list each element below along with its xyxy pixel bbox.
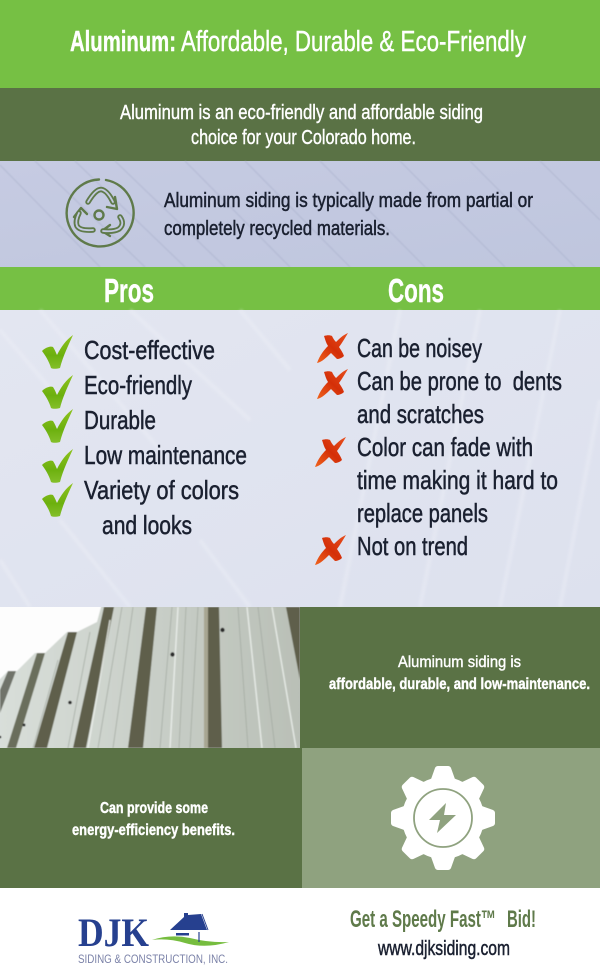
intro band	[0, 88, 600, 161]
heading: cons: Cons	[388, 272, 444, 309]
panel text: energy-efficiency benefits.	[72, 822, 235, 839]
pros text: Durable	[84, 405, 156, 435]
panel: affordable durable low-maintenance	[300, 607, 600, 748]
cons text: Can be noisey	[357, 333, 482, 363]
intro text: choice for your Colorado home.	[191, 127, 416, 149]
pros text: Eco-friendly	[84, 370, 192, 400]
logo: DJK Siding & Construction	[78, 910, 229, 966]
cons text: time making it hard to	[357, 465, 558, 495]
intro text	[120, 102, 483, 149]
cons text	[357, 333, 562, 561]
recycling text: Aluminum siding is typically made from partial or	[164, 190, 533, 212]
title banner	[0, 0, 600, 88]
cons text: replace panels	[357, 498, 488, 528]
panel text: Aluminum siding is	[398, 654, 521, 671]
recycling text: completely recycled materials.	[164, 218, 390, 240]
logo: DJK Siding & Construction: DJK	[78, 910, 149, 955]
panel: energy efficiency	[0, 748, 302, 888]
pros and cons header	[0, 267, 600, 310]
pros text: and looks	[102, 510, 192, 540]
photo: aluminum siding panels	[0, 607, 300, 748]
cons text: Color can fade with	[357, 432, 533, 462]
pros text	[84, 335, 247, 540]
panel text	[329, 654, 590, 693]
icon: check marks	[42, 335, 73, 517]
cons text: and scratches	[357, 399, 484, 429]
panel text	[72, 800, 235, 839]
intro text: Aluminum is an eco-friendly and affordable siding	[120, 102, 483, 124]
recycled materials panel	[0, 161, 600, 267]
icon: recycling arrows	[67, 180, 134, 246]
call to action: Bid!	[507, 906, 536, 933]
panel: gear icon	[302, 748, 600, 888]
pros text: Variety of colors	[84, 475, 239, 505]
title text: Aluminum:	[70, 26, 176, 58]
pros text: Cost-effective	[84, 335, 215, 365]
footer	[0, 888, 600, 979]
pros text: Low maintenance	[84, 440, 247, 470]
icon: x marks	[315, 333, 348, 565]
website url: www.djksiding.com	[377, 938, 510, 960]
cons list	[315, 333, 562, 565]
cons text: Not on trend	[357, 531, 468, 561]
pros and cons panel	[0, 310, 600, 607]
call to action: Get a Speedy Fast™	[350, 906, 496, 933]
icon: gear with lightning bolt	[391, 766, 495, 870]
heading: pros: Pros	[104, 272, 154, 309]
pros list	[42, 335, 247, 540]
recycling text	[164, 190, 533, 240]
panel text: Can provide some	[100, 800, 208, 817]
logo: DJK Siding & Construction: SIDING & CONSTRUCTION, INC.	[78, 952, 228, 966]
